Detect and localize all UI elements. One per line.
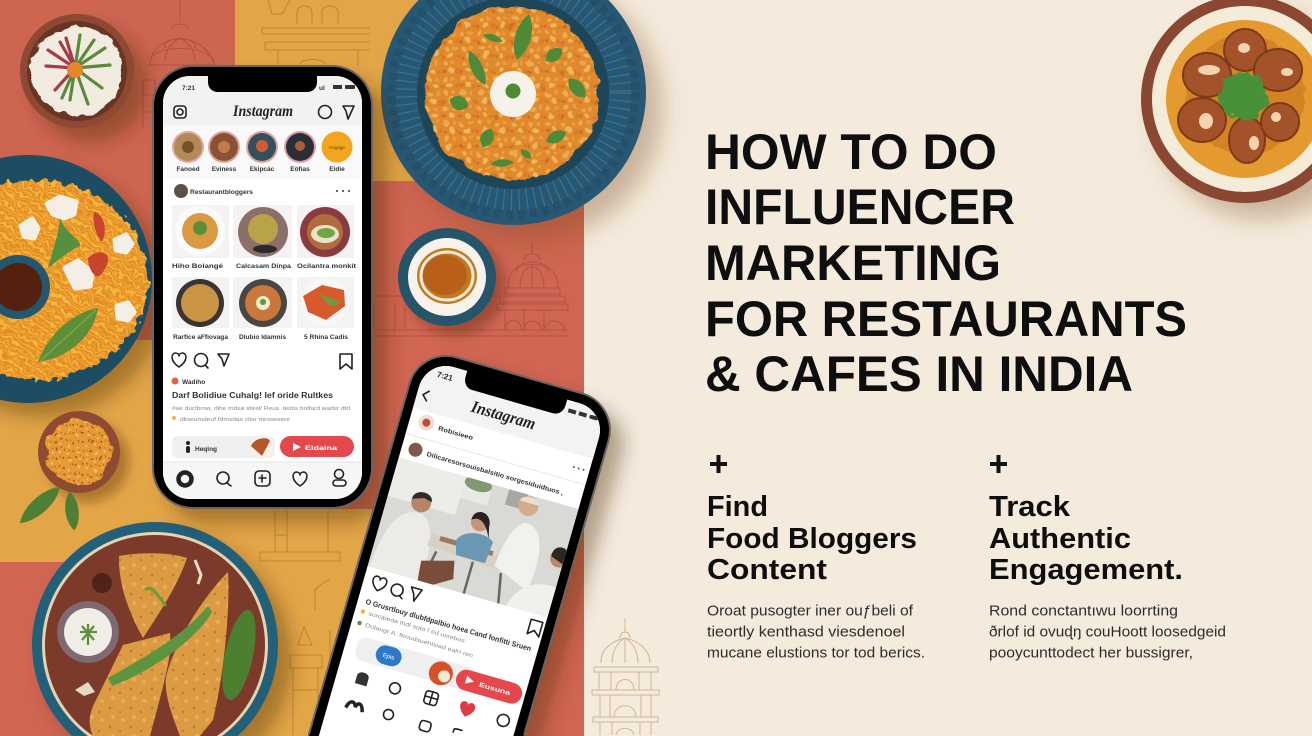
line art: pagoda on cream [592,618,659,735]
text block: track authentic engagement: Engagement. [989,554,1183,586]
title [705,124,1187,402]
dip cup [57,601,119,663]
header: Instagram logotype and icons [174,103,354,120]
stories row: Eidie [329,166,345,173]
notch [208,76,317,92]
line art: temple centre right [374,242,568,336]
caption: Dolaugr A. fenudsuehtsiad ealrt ren [364,623,474,659]
call to action bar: Epis [382,653,395,662]
header: Instagram logotype and icons: Instagram [232,103,293,120]
call to action bar [172,435,354,459]
icon: curry leaves [15,481,81,531]
status bar: ul [319,85,325,92]
status bar [182,85,355,90]
caption: Wadiho [182,379,205,386]
screen content [356,366,600,704]
dish: white dosa in terracotta bowl [20,14,134,128]
text block: track authentic engagement: Rond conctantıwu loorrting [989,602,1178,620]
text block: find food bloggers: Find [707,491,768,523]
caption: dliseumdeuf fdmsdas clisr mrosesere [180,417,290,423]
phone: Instagram post, tilted [308,356,611,736]
food grid: Dlubio Idamnis [239,334,286,341]
food grid: Hiho Bolangé [172,263,223,270]
dish: flatbreads on large plate [32,522,278,736]
phone: Instagram feed [153,66,372,508]
dish: spiced mash bowl [38,411,120,493]
caption: surcipeda thdl soto f ed usrebos [368,611,466,645]
text block: track authentic engagement: Authentic [989,523,1131,555]
title: & CAFES IN INDIA [705,346,1133,402]
line art: temple bottom left on yellow [260,510,350,735]
icon: plus [710,455,727,473]
call to action bar [353,636,525,708]
basil leaves [447,12,590,168]
stories row [172,131,352,173]
text block: find food bloggers [707,455,925,662]
status bar [436,370,599,425]
stories row: Hogage [329,145,345,150]
status bar: 7:21 [436,370,454,383]
action icons [370,574,543,638]
stories row: Ekipcác [250,166,275,173]
dish: chutney in small blue bowl [398,228,496,326]
sauce bowl [0,255,50,319]
call to action bar: Eldaina [305,445,338,452]
text block: find food bloggers: tieortly kenthasd viesdenoel [707,624,905,640]
text block: find food bloggers: Content [707,554,827,586]
rice ball [490,71,536,117]
status bar: 7:21 [182,85,195,92]
account row: Dilicaresorsouisbalsitio sorgesiduidtuos , [426,451,564,497]
food grid: 5 Rhina Cadis [304,334,348,341]
caption: O Grusrtlouy dlubfdpalbio hoea Cand fonfitti Sruen [365,597,533,653]
food grid: Calcasam Dinpa [236,263,291,270]
food grid: Rarfice aFfiovaga [173,334,228,341]
header: back arrow and Instagram logotype: Instagram [468,397,538,433]
stories row: Eviness [212,166,237,173]
people and table [370,492,566,618]
background: colour blocks [0,0,584,736]
food grid [172,205,357,341]
line art: temple dome top left [143,0,217,128]
rice and garnish [21,197,134,362]
notch [463,369,568,416]
text block: find food bloggers: Food Bloggers [707,523,917,555]
text block: track authentic engagement [989,455,1226,662]
caption: Darf Bolidiue Cuhalg! lef oride Rultkes [172,391,334,400]
line art: temple top centre [262,0,370,66]
text block: track authentic engagement: Track [989,491,1071,523]
stories row: Fanoed [176,166,200,173]
title: INFLUENCER [705,179,1015,235]
post photo: friends at a dining table [368,455,583,619]
account row: Robisieeo [437,425,474,442]
text block: track authentic engagement: pooycunttodect her bussigrer, [989,644,1193,662]
call to action bar: Eusuna [478,682,511,697]
text block: track authentic engagement: ðrlof id ovuɖŋ couHoott loosedgeid [989,624,1226,640]
title: HOW TO DO [705,124,997,180]
food grid: Ocilantra monkit [297,263,357,270]
title: MARKETING [705,235,1001,291]
dish: saffron noodles on blue plate [0,155,152,403]
caption [356,596,533,674]
action icons [172,353,352,369]
dish: millet dosa on ribbed blue plate [381,0,646,225]
bottom nav [346,671,511,734]
caption: #ae duclbrow, dihe mdsø sbrel/ Reus. tesbs bolfard wadsr dtd [172,406,350,412]
caption [172,378,350,423]
post header: Restaurantbloggers [190,189,253,196]
dish: kofta curry top right [1141,0,1312,203]
account row [400,410,592,504]
stories row: Eöfias [290,166,310,173]
header: back arrow and Instagram logotype [421,383,538,433]
text block: find food bloggers: mucane elustions tor tod berics. [707,644,925,662]
bottom nav [163,462,362,486]
icon: plus [990,455,1007,473]
text block: find food bloggers: Oroat pusogter iner ouƒbeli of [707,602,914,620]
title: FOR RESTAURANTS [705,291,1187,347]
post header [174,184,350,198]
call to action bar: Heqing [195,446,217,453]
